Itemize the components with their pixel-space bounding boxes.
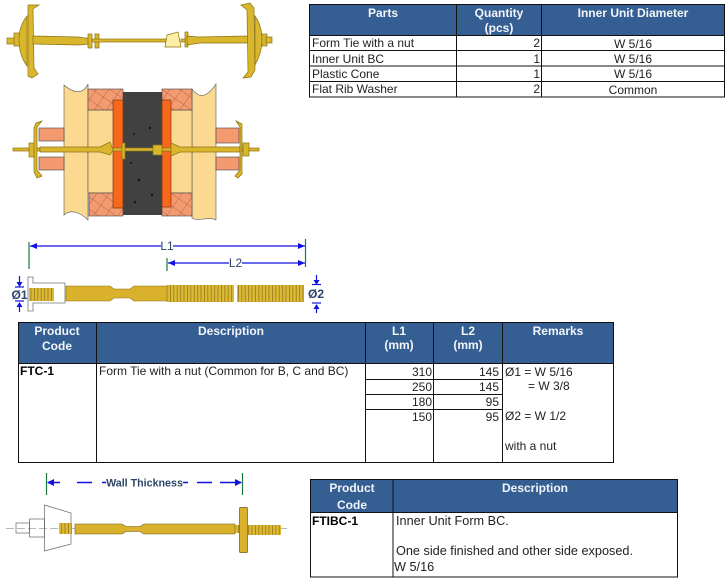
rows: Common bbox=[609, 83, 657, 97]
concrete core bbox=[123, 92, 162, 215]
row: FTC-1: with a nut bbox=[504, 439, 557, 453]
rows: Flat Rib Washer bbox=[312, 82, 398, 96]
wall thickness dimension: Wall Thickness bbox=[106, 478, 183, 490]
row: FTC-1: 250 bbox=[412, 380, 432, 394]
row: FTC-1: 95 bbox=[486, 395, 499, 409]
row: FTIBC-1: Inner Unit Form BC. bbox=[396, 514, 509, 528]
row: FTC-1: Ø1 = W 5/16 bbox=[505, 365, 573, 379]
row: FTC-1: 145 bbox=[479, 380, 499, 394]
L2 dimension: L2 bbox=[229, 256, 242, 270]
diameter 1 marker bbox=[11, 276, 28, 312]
row: FTIBC-1: FTIBC-1 bbox=[312, 514, 358, 528]
illustration: wall section with form ties bbox=[13, 84, 259, 220]
grid bbox=[310, 479, 678, 577]
row: FTC-1: 310 bbox=[412, 365, 432, 379]
header row: Code bbox=[42, 339, 72, 353]
left formwork panels bbox=[39, 84, 123, 220]
L2 dimension bbox=[167, 256, 305, 271]
illustration: form tie dimension drawing bbox=[11, 239, 324, 313]
inner unit rod bbox=[59, 508, 281, 552]
rows: W 5/16 bbox=[614, 67, 652, 81]
table: inner unit bbox=[310, 479, 678, 577]
center line bbox=[6, 528, 287, 530]
rows: 2 bbox=[533, 36, 540, 50]
rows: 1 bbox=[533, 52, 540, 66]
row: FTIBC-1 bbox=[312, 514, 633, 574]
header row: L1 bbox=[392, 324, 406, 338]
header row bbox=[310, 479, 678, 512]
header row bbox=[309, 4, 725, 35]
header row: (mm) bbox=[453, 338, 483, 352]
header row: Parts bbox=[368, 6, 398, 20]
header row: Product bbox=[329, 481, 375, 495]
grid bbox=[18, 322, 614, 463]
header row: Description bbox=[502, 481, 568, 495]
header row: Code bbox=[337, 498, 367, 512]
rows: W 5/16 bbox=[614, 52, 652, 66]
rows bbox=[312, 36, 657, 97]
cone outline bbox=[16, 505, 71, 551]
row: FTC-1: 180 bbox=[412, 395, 432, 409]
illustration: form tie assembly bbox=[7, 3, 272, 78]
header row: Remarks bbox=[533, 324, 584, 338]
header row: Inner Unit Diameter bbox=[578, 6, 689, 20]
right tie with plate and nut bbox=[181, 3, 272, 78]
tie rod through wall bbox=[13, 121, 259, 178]
header row: Description bbox=[198, 324, 264, 338]
row: FTC-1: Ø2 = W 1/2 bbox=[505, 409, 566, 423]
row: FTC-1: FTC-1 bbox=[20, 364, 54, 378]
header row bbox=[18, 322, 614, 363]
wall thickness dimension bbox=[46, 473, 242, 495]
row: FTIBC-1: W 5/16 bbox=[394, 560, 434, 574]
row: FTC-1: 150 bbox=[412, 410, 432, 424]
plastic cone bbox=[165, 32, 181, 47]
right formwork panels bbox=[162, 84, 239, 220]
row: FTC-1: = W 3/8 bbox=[528, 379, 570, 393]
header row: (pcs) bbox=[485, 21, 513, 35]
rows: W 5/16 bbox=[614, 37, 652, 51]
header row: Quantity bbox=[475, 6, 524, 20]
row: FTC-1 bbox=[20, 364, 573, 453]
row: FTC-1: Form Tie with a nut (Common for B, C and BC) bbox=[99, 364, 348, 378]
table: form tie specifications bbox=[18, 322, 614, 463]
threaded rod bbox=[28, 277, 304, 311]
row: FTC-1: 145 bbox=[479, 365, 499, 379]
rows: Plastic Cone bbox=[312, 67, 380, 81]
header row: Product bbox=[34, 324, 80, 338]
header row: L2 bbox=[461, 324, 475, 338]
left tie with plate and nut bbox=[7, 5, 166, 78]
header row: (mm) bbox=[384, 338, 414, 352]
illustration: inner unit with wall thickness bbox=[6, 473, 287, 552]
rows: 2 bbox=[533, 82, 540, 96]
row: FTIBC-1: One side finished and other side exposed. bbox=[396, 544, 633, 558]
row: FTC-1: 95 bbox=[486, 410, 499, 424]
L1 dimension: L1 bbox=[160, 239, 174, 253]
grid bbox=[309, 4, 725, 97]
diameter 2 marker: Ø2 bbox=[308, 287, 324, 301]
rows: 1 bbox=[533, 67, 540, 81]
diameter 1 marker: Ø1 bbox=[11, 288, 28, 302]
L1 dimension bbox=[29, 239, 306, 269]
rows: Inner Unit BC bbox=[312, 52, 384, 66]
rows: Form Tie with a nut bbox=[312, 36, 415, 50]
diameter 2 marker bbox=[308, 275, 324, 313]
orange form plates bbox=[113, 100, 171, 208]
table: parts list bbox=[309, 4, 725, 97]
